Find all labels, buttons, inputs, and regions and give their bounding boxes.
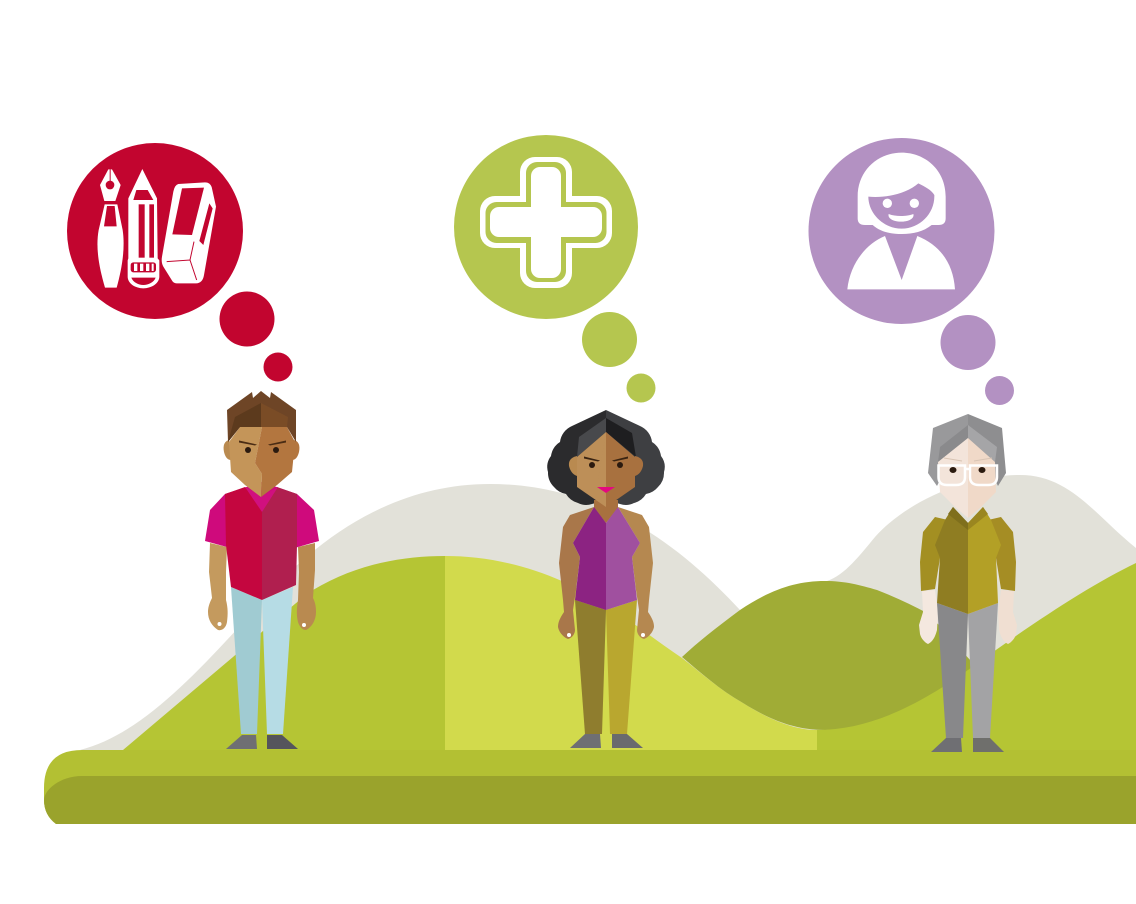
icon: pen, pencil and eraser	[97, 169, 216, 288]
olive shirt	[920, 507, 1016, 614]
light blue trousers	[231, 587, 293, 734]
landscape	[44, 475, 1136, 824]
head	[577, 432, 635, 507]
head	[229, 427, 295, 497]
right arm and hand	[998, 590, 1017, 644]
icon: pencil	[128, 169, 159, 288]
shoes	[570, 734, 643, 748]
glasses	[938, 466, 997, 485]
spiky brown hair	[227, 391, 296, 442]
right arm and hand	[297, 543, 316, 630]
person: man in red t-shirt	[205, 391, 319, 749]
person: older woman with glasses	[919, 414, 1017, 752]
red t-shirt	[205, 482, 319, 600]
shoes	[226, 735, 298, 749]
ground front band	[44, 776, 1136, 824]
left green hill	[123, 556, 445, 750]
person: woman in purple top	[547, 410, 665, 748]
dark olive hill	[682, 581, 975, 730]
icon: fountain pen	[97, 169, 124, 288]
yellow hill	[445, 556, 817, 750]
left arm and hand	[558, 507, 594, 639]
head	[938, 438, 997, 518]
ground top band	[44, 750, 1136, 824]
left arm and hand	[919, 590, 938, 644]
ears	[569, 456, 577, 476]
thought bubble: woman portrait	[808, 138, 1014, 405]
curly black hair	[547, 410, 665, 505]
neck	[594, 500, 618, 523]
thought bubble: art supplies	[67, 143, 292, 382]
grey background hills	[80, 475, 1136, 750]
icon: medical cross	[480, 157, 612, 288]
left arm and hand	[208, 543, 228, 630]
grey trousers	[937, 603, 998, 738]
grey hair	[928, 414, 1006, 486]
icon: woman portrait	[847, 153, 955, 289]
right green hill	[817, 563, 1136, 750]
right arm and hand	[618, 507, 654, 639]
olive trousers	[575, 600, 637, 734]
icon: eraser	[162, 182, 216, 283]
thought bubble: medical cross	[454, 135, 656, 402]
ears	[224, 440, 231, 460]
purple top	[573, 507, 640, 610]
shoes	[931, 738, 1004, 752]
